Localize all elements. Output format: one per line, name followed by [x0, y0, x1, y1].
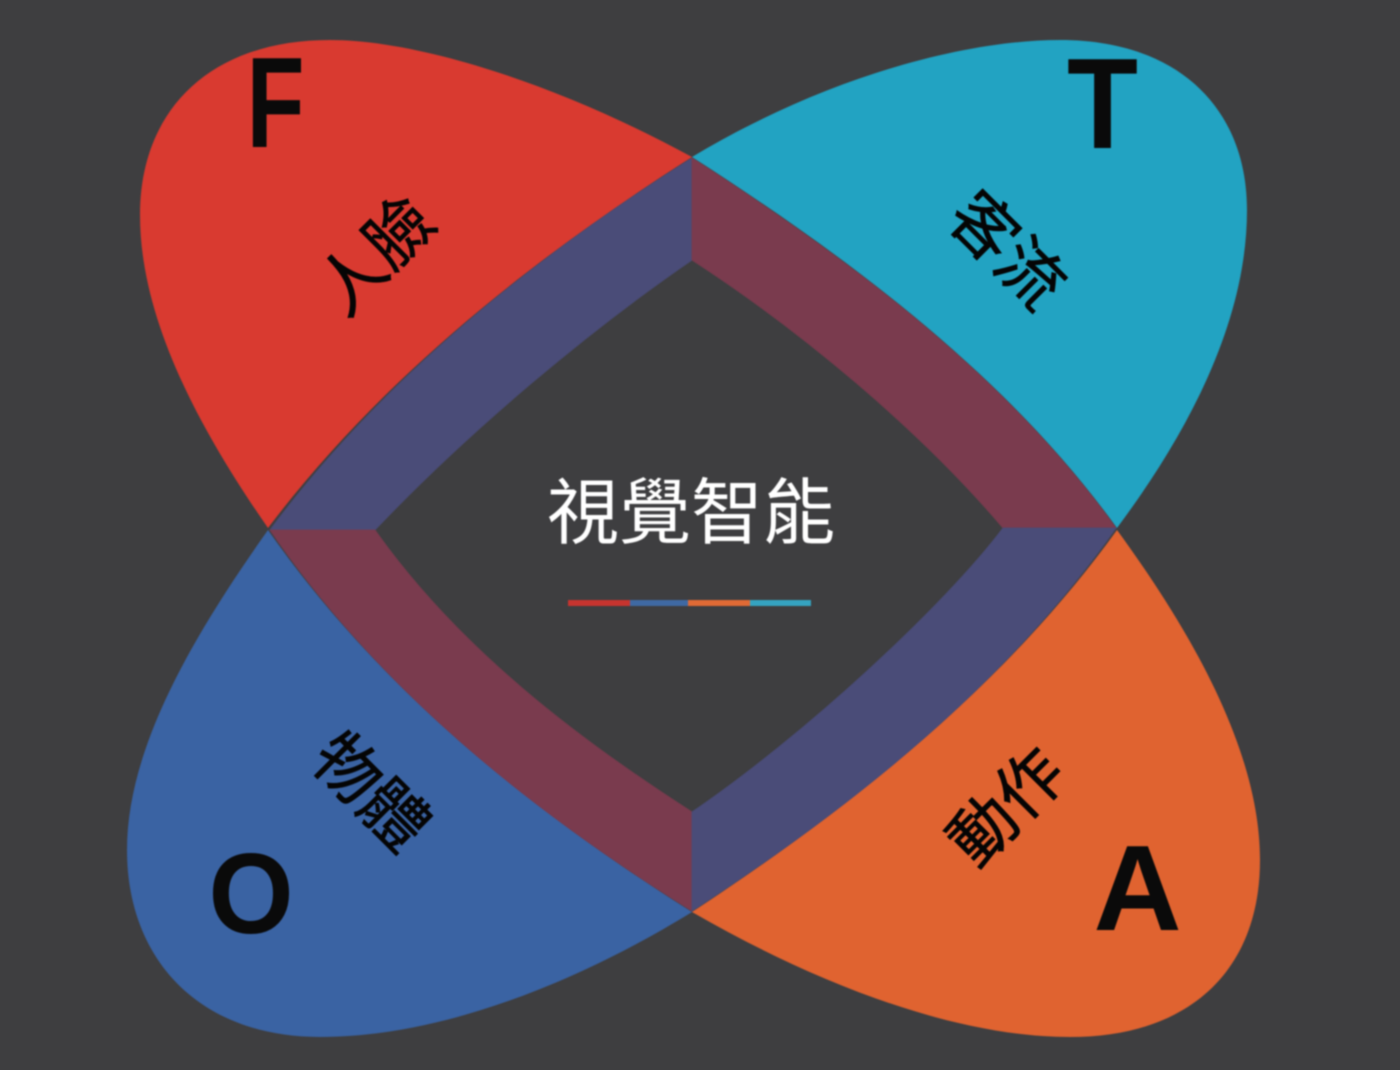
- panel: red petal F face: [140, 31, 692, 528]
- label: face: 人臉: [303, 183, 448, 329]
- letter O: O: [208, 830, 294, 957]
- panel: orange petal A action: [692, 530, 1260, 1037]
- panel: teal petal T traffic: [692, 32, 1247, 528]
- band: bottom-right overlap: [692, 528, 1116, 911]
- colour legend bar: [568, 600, 811, 606]
- band: bottom-left overlap: [270, 530, 692, 911]
- panel: blue petal O object: [127, 530, 692, 1037]
- title: vision intelligence: 視覺智能: [547, 474, 835, 554]
- label: customer flow: 客流: [934, 178, 1080, 323]
- band: top-right overlap: [692, 158, 1116, 528]
- letter A: A: [1093, 820, 1182, 956]
- letter F: F: [247, 31, 304, 174]
- letter T: T: [1067, 32, 1138, 176]
- label: action: 動作: [934, 734, 1080, 880]
- band: top-left overlap: [270, 158, 692, 530]
- label: object: 物體: [298, 719, 443, 865]
